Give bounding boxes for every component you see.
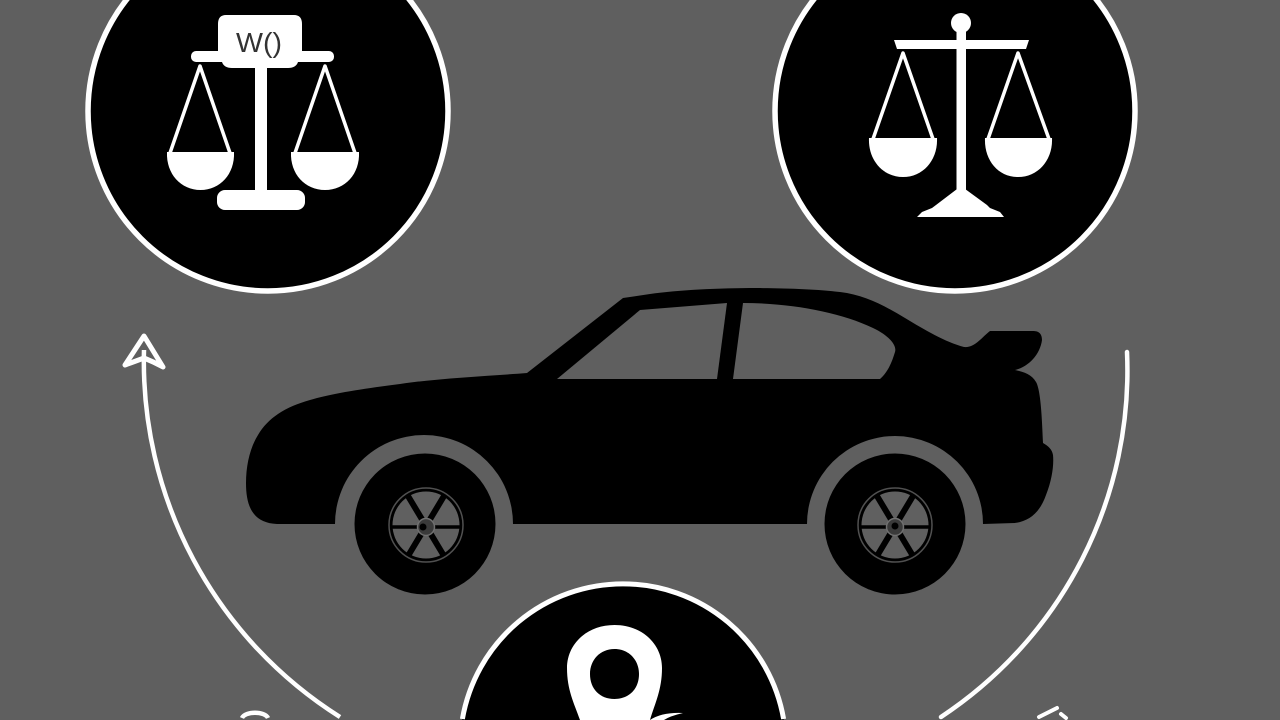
icon: partial circle at bottom left (242, 713, 268, 718)
panel: bottom location badge (462, 584, 784, 720)
car silhouette (246, 288, 1053, 594)
panel: right scales badge (775, 0, 1135, 291)
icon: pin tail (650, 713, 683, 720)
front wheel (354, 454, 496, 594)
icon: location pin (567, 625, 662, 720)
plate label: W() (236, 27, 282, 58)
car body (246, 288, 1053, 524)
icon: partial arrowhead at bottom right (1039, 708, 1066, 718)
icon: balance scales (869, 13, 1052, 217)
rear wheel (824, 454, 966, 594)
arrow: left curved arrow going up (125, 336, 340, 717)
icon: scales with labelled plate (167, 15, 359, 210)
arrow: right curved line (941, 352, 1127, 717)
car front window (557, 303, 727, 379)
panel: left scales badge (88, 0, 448, 291)
car rear window (733, 303, 895, 379)
